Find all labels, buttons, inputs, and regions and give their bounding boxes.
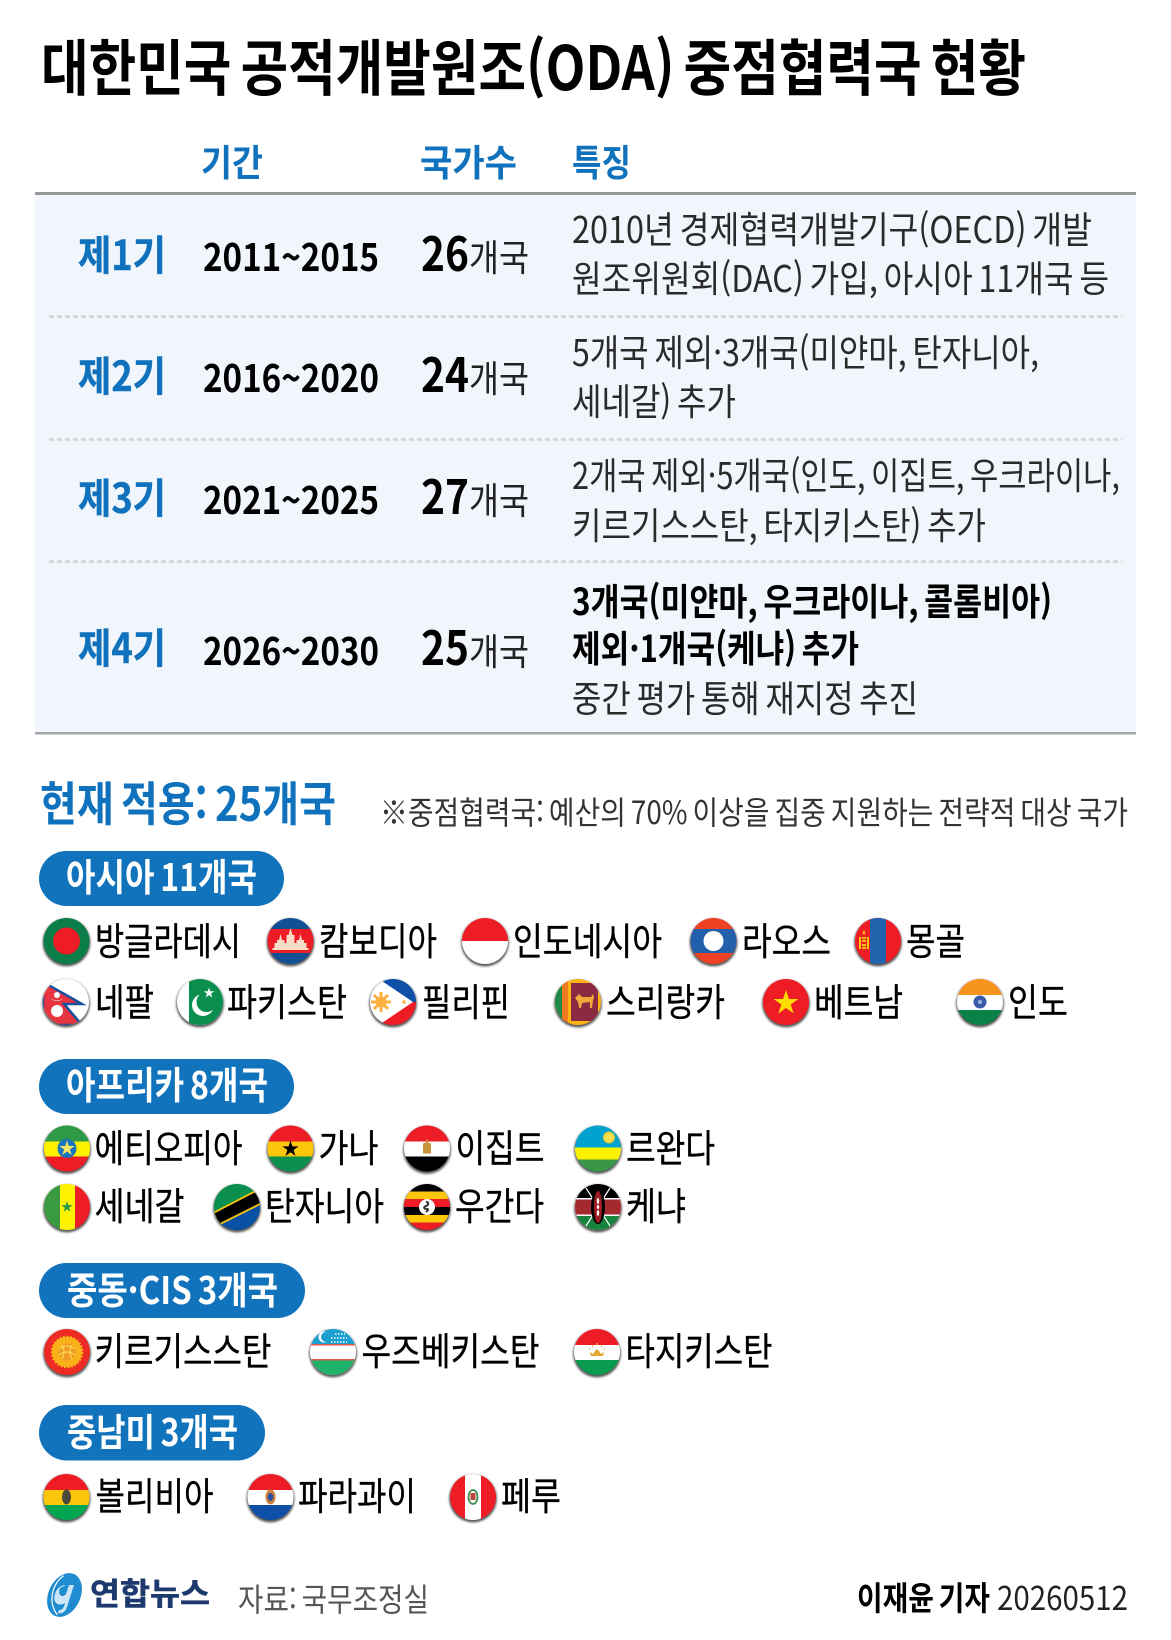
row: period 4: 2026~2030 (203, 621, 379, 676)
item: Uzbekistan (309, 1321, 540, 1377)
item: Vietnam (762, 972, 903, 1027)
item: Ghana (267, 1118, 378, 1174)
row: period 4: 개국 (469, 622, 529, 676)
table header row: 국가수 (420, 133, 517, 187)
item: Paraguay: 파라과이 (298, 1466, 416, 1521)
row: period 4: 제4기 (78, 615, 166, 675)
row: period 1: 26 (421, 216, 469, 285)
item: Nepal (42, 972, 154, 1027)
item: Bangladesh: 방글라데시 (95, 911, 241, 966)
credit: 이재윤 기자 (857, 1572, 990, 1620)
row: period 1: 2011~2015 (203, 227, 379, 282)
item: Kenya: 케냐 (626, 1176, 686, 1231)
group: Latin America 3 (39, 1402, 561, 1522)
row: period 2: 5개국 제외·3개국(미얀마, 탄자니아, (572, 323, 1039, 377)
item: Egypt: 이집트 (456, 1118, 544, 1173)
row: period 3: 제3기 (78, 465, 166, 525)
table header row: 특징 (572, 133, 631, 187)
item: Uganda: 우간다 (455, 1176, 544, 1231)
pill: Latin America: 중남미 3개국 (67, 1402, 238, 1457)
item: Kyrgyzstan (43, 1321, 272, 1377)
item: Kenya (574, 1176, 686, 1232)
item: Cambodia: 캄보디아 (319, 911, 437, 966)
row: period 4: 제외·1개국(케냐) 추가 (572, 619, 859, 673)
table: ODA periods (35, 133, 1136, 734)
row: period 2: 세네갈) 추가 (572, 372, 736, 426)
item: Sri Lanka (554, 972, 725, 1027)
item: Vietnam: 베트남 (814, 972, 903, 1027)
item: Uganda (403, 1176, 544, 1232)
credit (857, 1572, 1128, 1620)
item: Senegal: 세네갈 (94, 1176, 184, 1231)
item: Laos (690, 911, 831, 966)
item: Bolivia: 볼리비아 (96, 1466, 214, 1521)
group: Africa 8 (39, 1055, 715, 1247)
row: period 3 (78, 446, 1120, 550)
source: 자료: 국무조정실 (238, 1575, 429, 1621)
item: Tanzania (212, 1183, 384, 1234)
item: Sri Lanka: 스리랑카 (606, 972, 725, 1027)
item: Philippines (368, 978, 507, 1029)
item: Mongolia (854, 911, 965, 966)
row: period 2: 개국 (469, 349, 529, 403)
item: Peru: 페루 (501, 1466, 561, 1521)
item: Tajikistan: 타지키스탄 (626, 1321, 772, 1376)
item: Cambodia (267, 911, 437, 966)
item: Uzbekistan: 우즈베키스탄 (362, 1321, 540, 1376)
row: period 4 (78, 572, 1052, 723)
logo: Yonhap News: 연합뉴스 (90, 1569, 210, 1614)
row: period 2: 제2기 (78, 343, 166, 403)
item: Indonesia (461, 911, 662, 966)
item: Pakistan: 파키스탄 (227, 972, 347, 1027)
item: Tajikistan (573, 1321, 772, 1377)
item: Tanzania: 탄자니아 (265, 1176, 384, 1231)
item: Kyrgyzstan: 키르기스스탄 (94, 1321, 272, 1376)
item: Ethiopia: 에티오피아 (94, 1118, 242, 1173)
item: Ghana: 가나 (318, 1118, 378, 1173)
row: period 1: 2010년 경제협력개발기구(OECD) 개발 (572, 200, 1092, 254)
item: Rwanda: 르완다 (626, 1118, 715, 1173)
row: period 3: 27 (421, 459, 469, 528)
row: period 1: 원조위원회(DAC) 가입, 아시아 11개국 등 (572, 249, 1109, 303)
row: period 2: 2016~2020 (203, 348, 379, 403)
pill: Africa: 아프리카 8개국 (66, 1055, 268, 1110)
pill: Asia: 아시아 11개국 (66, 847, 257, 902)
row: period 4: 3개국(미얀마, 우크라이나, 콜롬비아) (572, 572, 1052, 626)
item: India (956, 972, 1068, 1027)
row: period 2 (78, 323, 1039, 426)
item: Laos: 라오스 (742, 911, 831, 966)
credit: 20260512 (997, 1572, 1128, 1620)
item: Paraguay (245, 1473, 412, 1524)
item: Mongolia: 몽골 (906, 911, 965, 966)
row: period 1: 제1기 (78, 222, 166, 282)
item: Egypt (403, 1118, 544, 1174)
item: Bolivia (43, 1466, 214, 1522)
row: period 3: 키르기스스탄, 타지키스탄) 추가 (572, 496, 986, 550)
item: Ethiopia (43, 1118, 243, 1174)
table header row (201, 133, 631, 187)
pill: Middle East CIS: 중동·CIS 3개국 (67, 1260, 278, 1315)
item: Indonesia: 인도네시아 (513, 911, 662, 966)
item: Peru (449, 1466, 561, 1522)
item: Pakistan (176, 972, 347, 1027)
row: period 1: 개국 (469, 228, 529, 282)
item: Bangladesh (43, 911, 241, 966)
table header row: 기간 (201, 133, 263, 187)
heading: currently applied: 현재 적용: 25개국 (40, 766, 336, 835)
item: Rwanda (574, 1118, 715, 1174)
item: India: 인도 (1008, 972, 1068, 1027)
row: period 1 (78, 200, 1109, 303)
item: Senegal (43, 1176, 185, 1232)
footer (40, 1567, 1128, 1623)
row: period 3: 2021~2025 (203, 470, 379, 525)
item: Nepal: 네팔 (95, 972, 154, 1027)
group: Middle East CIS 3 (39, 1260, 772, 1377)
group: Asia 11 (39, 847, 1068, 1031)
row: period 2: 24 (421, 337, 469, 406)
item: Philippines: 필리핀 (422, 972, 510, 1027)
logo: Yonhap News (40, 1567, 210, 1623)
title: 대한민국 공적개발원조(ODA) 중점협력국 현황 (41, 19, 1026, 108)
row: period 4: 중간 평가 통해 재지정 추진 (572, 669, 918, 723)
row: period 3: 개국 (469, 471, 529, 525)
row: period 4: 25 (421, 610, 469, 679)
